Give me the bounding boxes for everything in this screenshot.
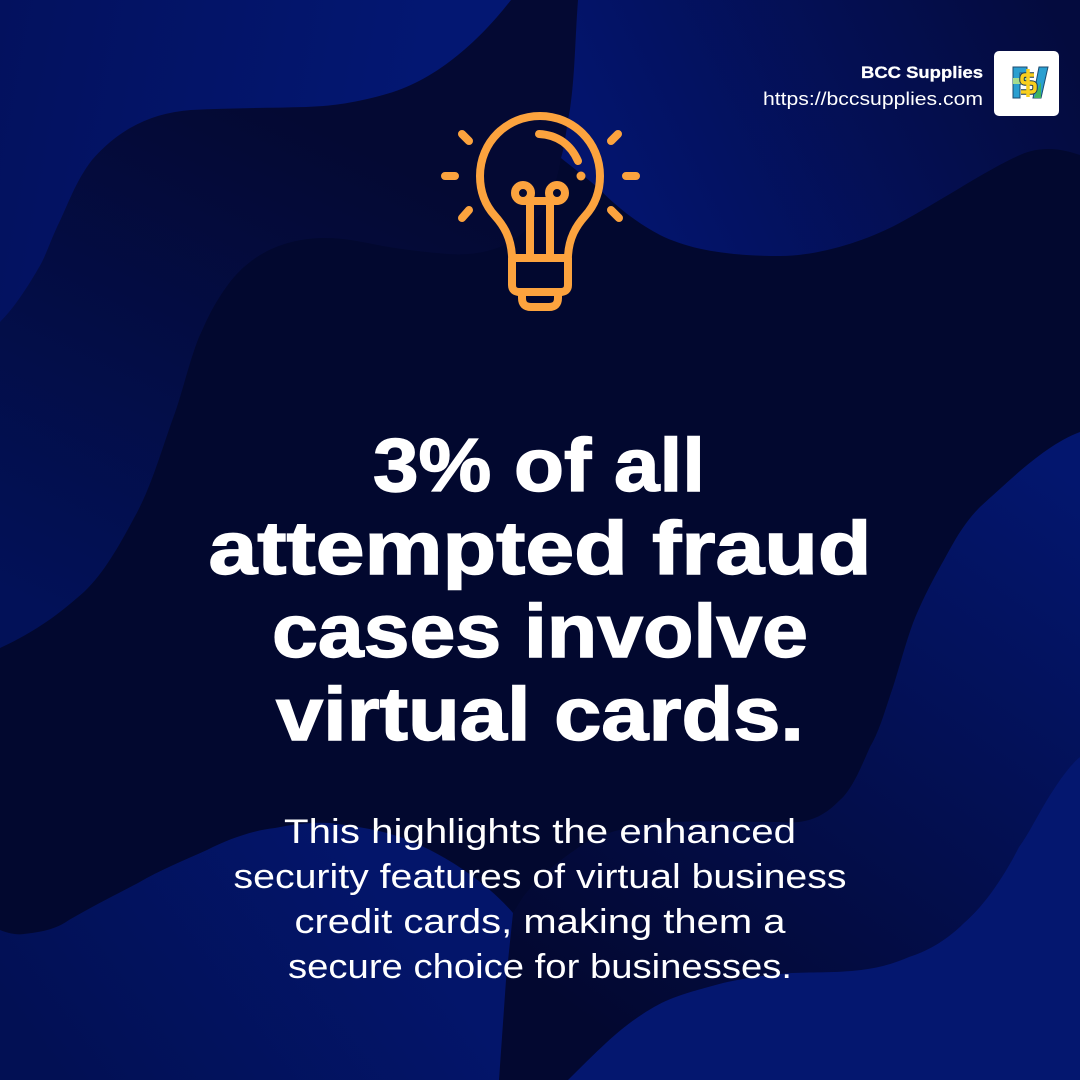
body text [234,813,846,986]
body text: credit cards, making them a [294,903,786,941]
headline: virtual cards. [276,672,804,756]
background: top-left light wave [0,0,511,322]
bulb base [512,258,568,292]
bulb outline [480,116,600,256]
highlight arc [539,134,578,161]
logo [994,51,1059,116]
headline: cases involve [272,589,808,673]
body text: This highlights the enhanced [284,813,796,851]
icon: light bulb [445,116,636,307]
background: right and bottom wave [499,432,1080,1080]
filament [515,185,565,256]
body text: security features of virtual business [234,858,846,896]
background: left mid-tone wave [0,0,578,648]
bulb tip [522,293,558,307]
rays [445,134,636,218]
background: top-right wave [561,0,1080,256]
headline [208,423,872,756]
brand name: BCC Supplies [861,63,983,82]
background: bottom-left wave [0,823,513,1080]
headline: 3% of all [373,423,705,507]
brand url: https://bccsupplies.com [763,89,983,109]
background: bottom-right light wave [568,757,1080,1080]
body text: secure choice for businesses. [288,948,792,986]
bulb highlight dot [576,172,586,180]
headline: attempted fraud [208,506,872,590]
